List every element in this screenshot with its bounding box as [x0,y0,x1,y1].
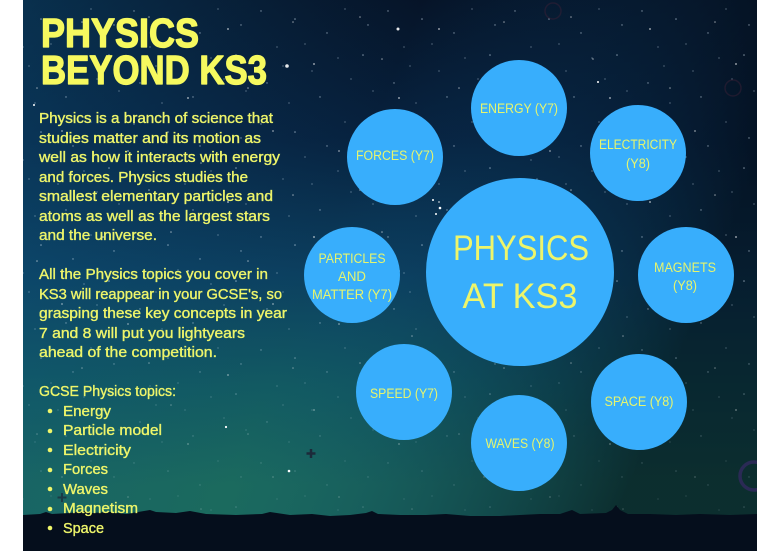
topic: Forces [347,109,443,205]
text block: intro paragraph: smallest elementary particles and [39,189,273,205]
topic: Magnets [638,227,734,323]
topic: Space [591,354,687,450]
text block: intro paragraph: atoms as well as the largest stars [39,209,270,225]
topic: Speed [356,344,452,440]
topic: Waves [471,395,567,491]
text block: GCSE topics list: Space [63,521,104,537]
text block: intro paragraph: well as how it interacts with energy [38,150,281,166]
text block: GCSE topics list: GCSE Physics topics: [39,384,176,400]
topic: Particles and Matter: PARTICLES [318,251,386,266]
hub: Physics at KS3 [426,178,614,366]
topic: Particles and Matter: MATTER (Y7) [312,287,392,302]
text block: GCSE topics list: Forces [63,462,108,478]
text block: GCSE topics list: Electricity [63,443,132,459]
text block: intro paragraph: Physics is a branch of science that [39,111,273,127]
hub: Physics at KS3: PHYSICS [453,229,589,268]
text block: KS3 paragraph: KS3 will reappear in your GCSE's, so [39,287,282,303]
treeline silhouette [23,505,757,551]
title [41,10,267,93]
topic: Electricity: (Y8) [626,156,650,171]
text block: GCSE topics list: Energy [63,404,112,420]
text block: KS3 paragraph: All the Physics topics you cover in [39,267,268,283]
hub: Physics at KS3: AT KS3 [462,277,578,316]
text block: intro paragraph [38,111,281,244]
title: PHYSICS [41,10,199,56]
topic: Waves: WAVES (Y8) [486,436,554,451]
topic: Forces: FORCES (Y7) [356,148,434,163]
text block: intro paragraph: studies matter and its motion as [39,131,261,147]
text block: KS3 paragraph: 7 and 8 will put you lightyears [39,326,245,342]
text block: KS3 paragraph [39,267,287,361]
text block: KS3 paragraph: grasping these key concepts in year [39,306,287,322]
title: BEYOND KS3 [41,47,267,93]
text block: intro paragraph: and forces. Physics studies the [39,170,248,186]
topic: Energy [471,60,567,156]
topic: Particles and Matter [304,227,400,323]
topic: Electricity: ELECTRICITY [599,137,677,152]
text block: GCSE topics list: Waves [63,482,108,498]
topic: Magnets: (Y8) [673,278,697,293]
topic: Space: SPACE (Y8) [604,394,674,409]
topic: Particles and Matter: AND [338,269,366,284]
topic: Speed: SPEED (Y7) [370,386,438,401]
topic: Energy: ENERGY (Y7) [480,101,558,116]
text block: intro paragraph: and the universe. [39,228,157,244]
text block: GCSE topics list: Magnetism [63,501,138,517]
topic: Magnets: MAGNETS [654,260,716,275]
text block: KS3 paragraph: ahead of the competition. [39,345,217,361]
topic: Electricity [590,105,686,201]
text block: GCSE topics list: Particle model [63,423,162,439]
text block: GCSE topics list [39,384,176,537]
